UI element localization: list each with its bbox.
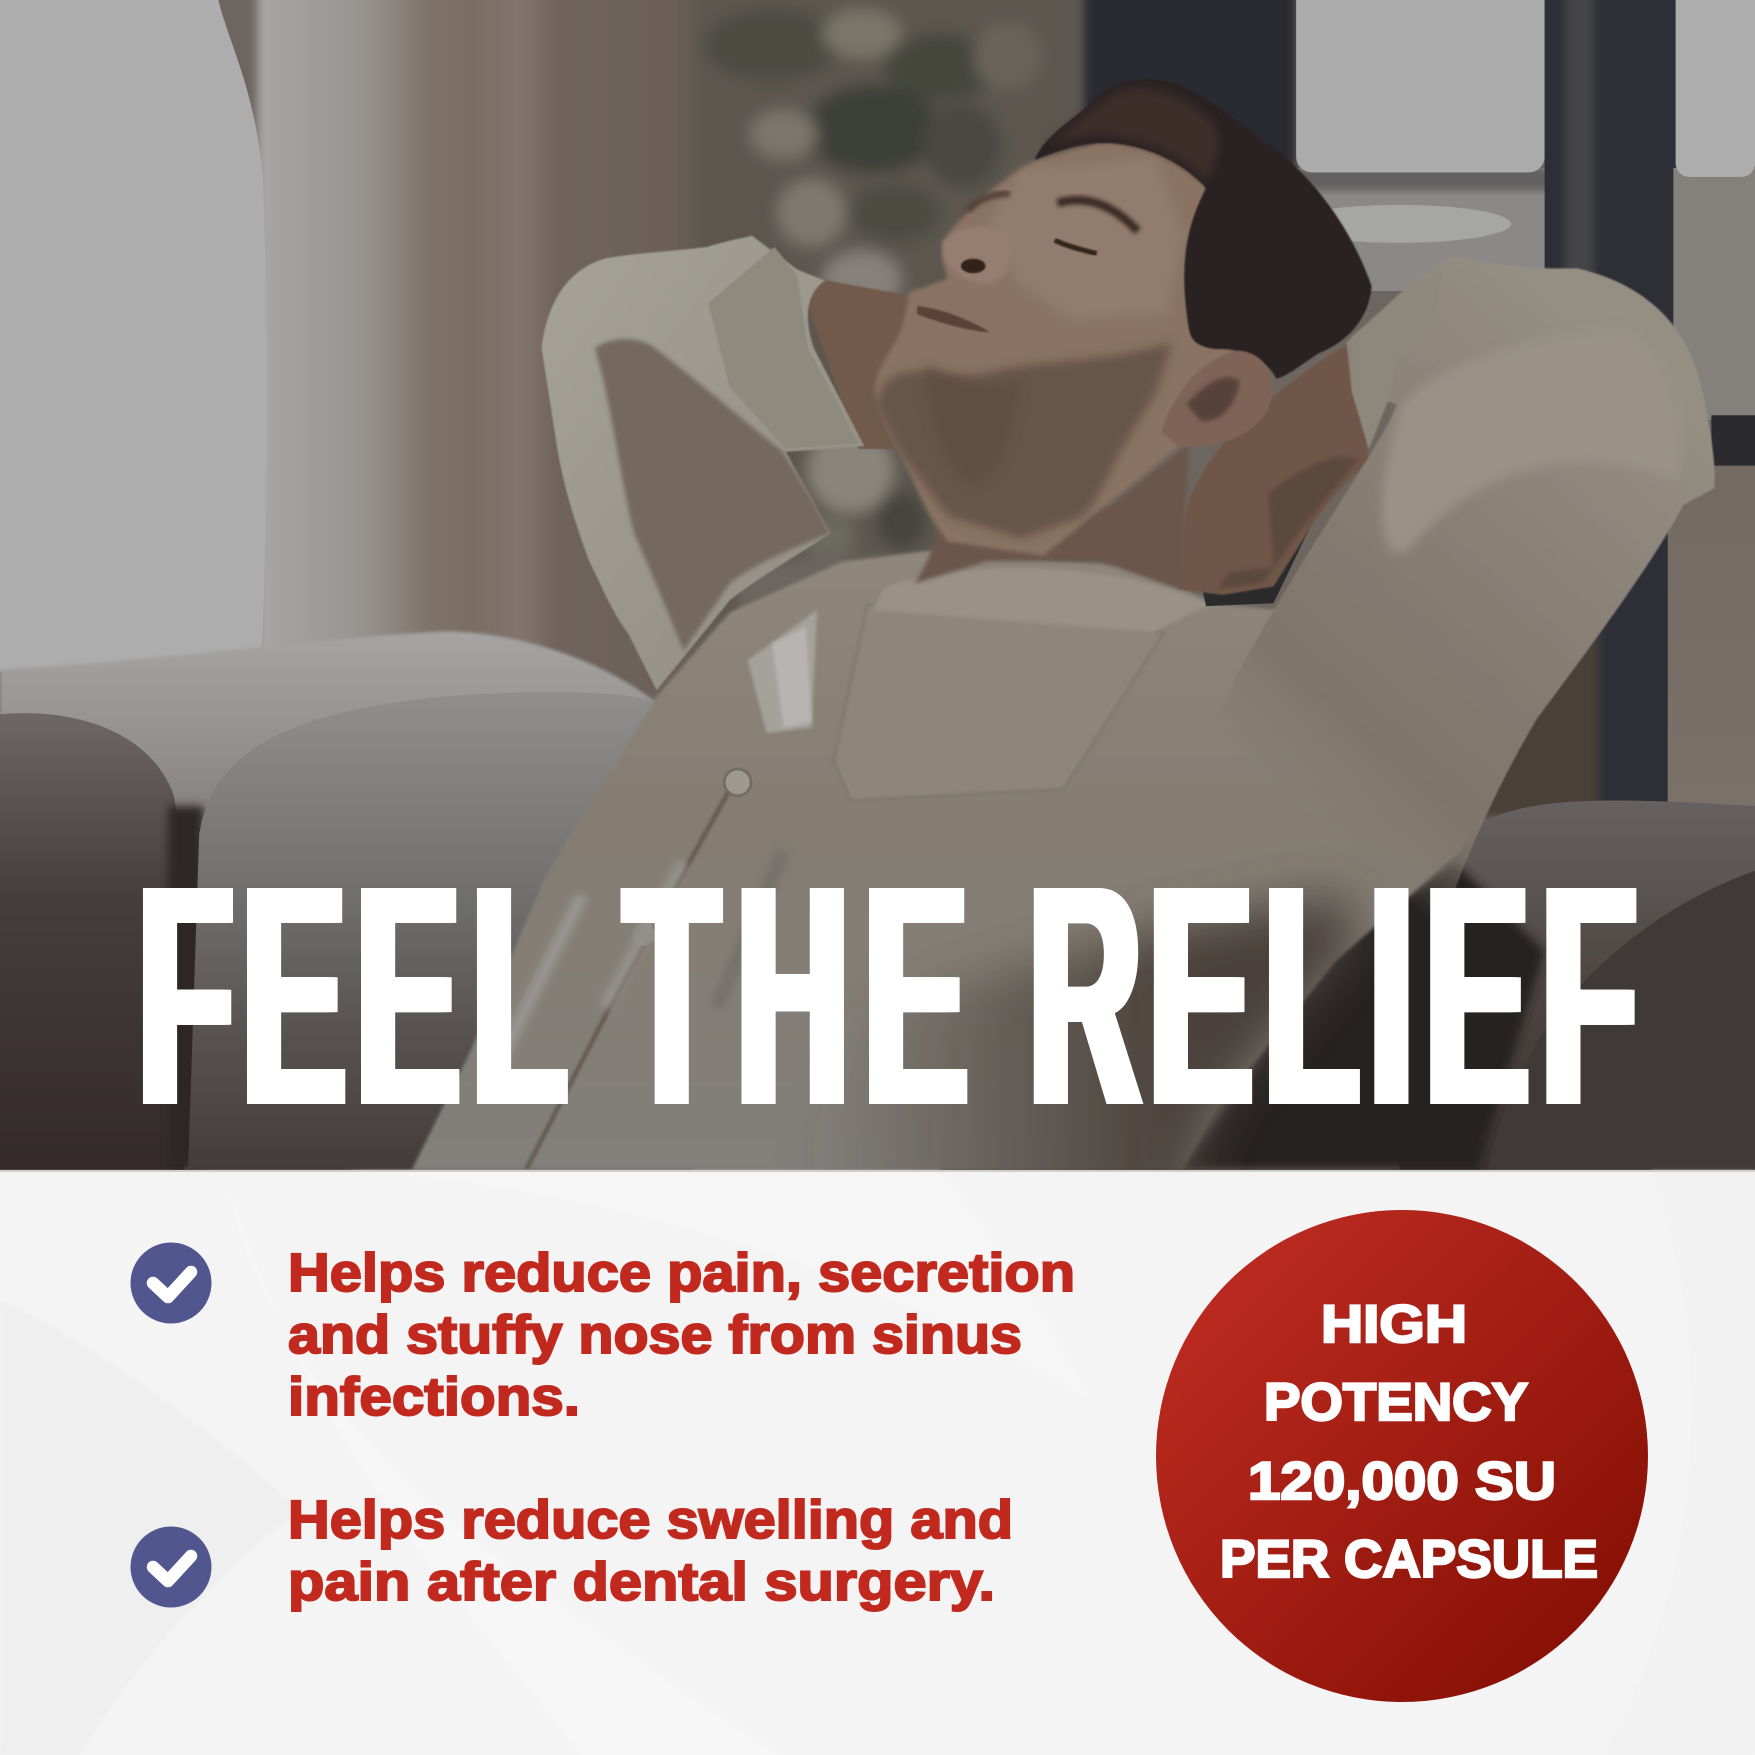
title: FEEL THE RELIEF: FEEL THE RELIEF [139, 821, 1636, 1171]
benefit 2: text: Helps reduce swelling and [288, 1490, 1013, 1550]
benefit 1: check icon [130, 1242, 212, 1324]
high potency badge [1156, 1210, 1648, 1702]
benefit 2: check icon [130, 1526, 212, 1608]
shadowed lower shirt [850, 874, 1374, 1170]
neck [914, 443, 1189, 589]
shirt collar and chest pocket [747, 569, 1206, 734]
badge text: POTENCY [1264, 1373, 1528, 1432]
ear [1161, 351, 1272, 447]
badge text: PER CAPSULE [1220, 1530, 1598, 1589]
benefit 1: text: infections. [288, 1367, 580, 1427]
badge text: HIGH [1321, 1295, 1467, 1354]
man's face and beard [875, 142, 1234, 556]
room background: wall and curtains [0, 0, 739, 694]
benefit 1: text: and stuffy nose from sinus [288, 1305, 1022, 1365]
badge text [1220, 1295, 1598, 1589]
blurred plant behind the man [694, 0, 1086, 560]
benefit 1: text: Helps reduce pain, secretion [288, 1243, 1075, 1303]
hero photo: man relaxing on sofa [0, 0, 1755, 1220]
shirt placket and button [526, 769, 751, 1170]
left raised arm in linen sleeve [542, 236, 943, 690]
lower panel with soft white background [0, 1170, 1755, 1755]
right raised arm in linen sleeve [1242, 256, 1716, 910]
sofa back and cushions [0, 631, 1755, 1170]
hand cradling the head [1178, 342, 1369, 606]
man's dark hair [1035, 79, 1372, 379]
benefit 2: text [288, 1490, 1013, 1612]
window frame and panes [1083, 0, 1755, 817]
benefit 1: text [288, 1243, 1075, 1427]
badge text: 120,000 SU [1248, 1452, 1556, 1511]
benefit 2: text: pain after dental surgery. [288, 1552, 995, 1612]
shirt torso [412, 551, 1477, 1170]
shirt folds [511, 851, 788, 1054]
